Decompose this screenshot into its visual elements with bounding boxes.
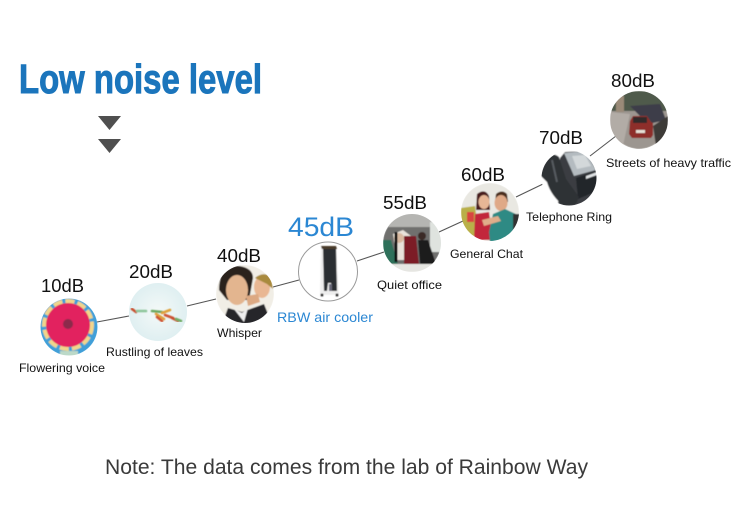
caption: Quiet office — [377, 278, 442, 292]
connector lines — [97, 136, 616, 322]
node: 45dB RBW air cooler — [277, 212, 373, 325]
node: 60dB general chat: 60dB — [461, 164, 505, 185]
title: Low noise level — [19, 56, 262, 102]
caption: Flowering voice — [19, 361, 105, 375]
icon: chat photo — [461, 183, 521, 242]
icon: traffic photo — [610, 91, 668, 150]
node: 60dB general chat — [450, 164, 524, 261]
icon: telephone photo — [540, 150, 598, 207]
icon: whisper photo — [216, 265, 274, 324]
node: 80dB streets of heavy traffic: 80dB — [611, 70, 655, 91]
icon: leaves photo — [129, 283, 187, 341]
node: 55dB quiet office — [377, 192, 442, 292]
node: 70dB telephone ring — [526, 127, 612, 224]
node: 45dB RBW air cooler: 45dB — [288, 212, 354, 242]
caption: Telephone Ring — [526, 210, 612, 224]
node: 40dB whisper — [216, 245, 274, 340]
node: 70dB telephone ring: 70dB — [539, 127, 583, 148]
caption: General Chat — [450, 247, 524, 261]
icon: flower photo — [40, 298, 98, 356]
node: 20dB rustling of leaves — [106, 261, 203, 359]
icon: double down arrows — [98, 116, 121, 153]
icon: air cooler — [298, 242, 358, 301]
node: 20dB rustling of leaves: 20dB — [129, 261, 173, 282]
caption: Streets of heavy traffic — [606, 156, 731, 170]
caption: Whisper — [217, 326, 262, 340]
infographic — [20, 63, 731, 478]
note: Note: The data comes from the lab of Rainbow Way — [105, 456, 588, 479]
node: 10dB flowering voice — [19, 275, 105, 375]
caption: RBW air cooler — [277, 309, 373, 325]
caption: Rustling of leaves — [106, 345, 203, 359]
node: 55dB quiet office: 55dB — [383, 192, 427, 213]
node: 80dB streets of heavy traffic — [606, 70, 731, 170]
node: 10dB flowering voice: 10dB — [41, 275, 84, 296]
node: 40dB whisper: 40dB — [217, 245, 261, 266]
icon: office photo — [383, 213, 442, 272]
